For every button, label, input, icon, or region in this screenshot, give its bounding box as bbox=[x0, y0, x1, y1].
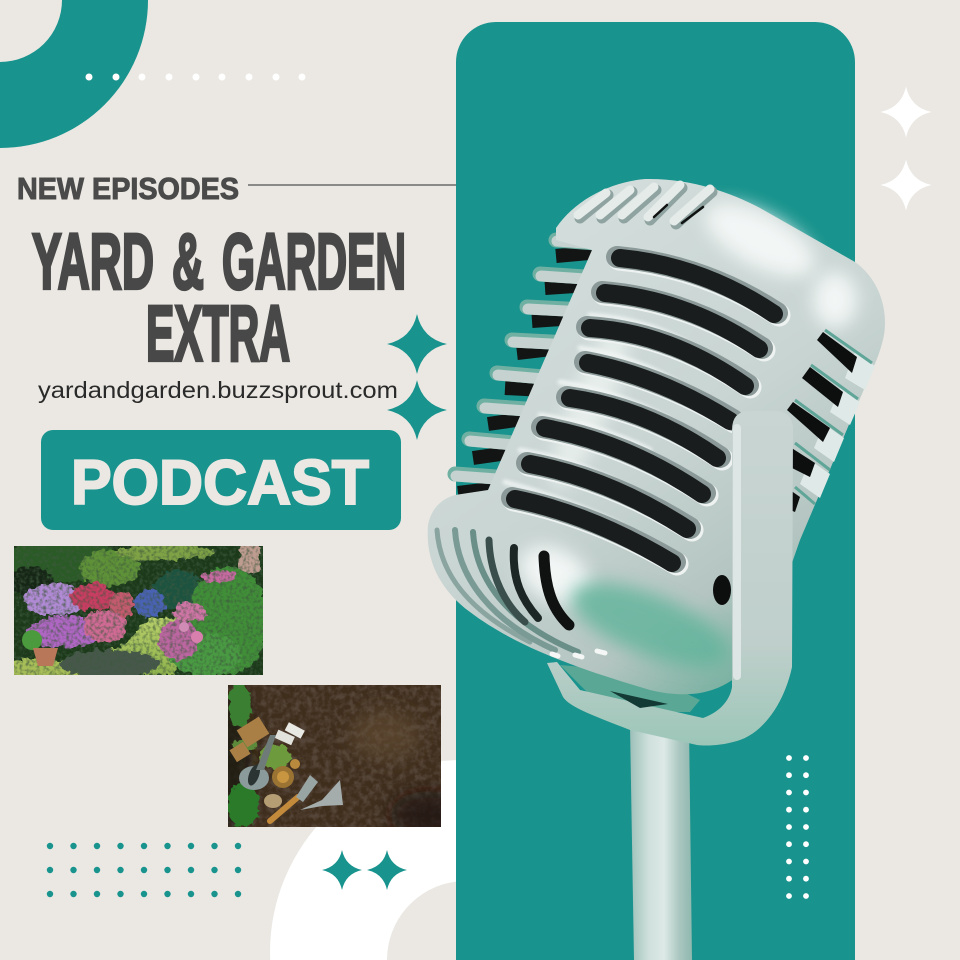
mic right grille bbox=[787, 330, 875, 512]
mic bracket sheen bbox=[733, 424, 741, 680]
corner arc shape bbox=[0, 0, 148, 148]
dot grid: panel right bbox=[786, 755, 809, 899]
mic screw shadow bbox=[610, 691, 668, 708]
title: & bbox=[172, 216, 204, 306]
kicker: new episodes: NEW EPISODES bbox=[17, 171, 239, 206]
mic top ribs bbox=[578, 185, 712, 224]
mic rib sheen bbox=[505, 315, 690, 525]
icon: teal sparkles by title bbox=[387, 314, 447, 440]
website url: yardandgarden.buzzsprout.com bbox=[38, 377, 398, 403]
title: EXTRA bbox=[146, 288, 290, 378]
title: GARDEN bbox=[222, 216, 406, 306]
dot grid: bottom left bbox=[47, 843, 241, 897]
mic front slots bbox=[512, 257, 779, 564]
icon: teal sparkles bottom bbox=[322, 850, 407, 890]
mic left ribs bbox=[455, 240, 610, 493]
kicker rule bbox=[248, 184, 456, 186]
dotted row: top bbox=[86, 74, 306, 80]
mic bracket bbox=[547, 411, 793, 746]
mic head highlights bbox=[509, 189, 857, 617]
icon: white sparkles top right bbox=[880, 86, 932, 210]
title: YARD bbox=[32, 216, 154, 306]
title bbox=[32, 216, 406, 378]
microphone bbox=[428, 179, 885, 960]
mic pivot knob bbox=[713, 575, 731, 605]
mic lower teal reflection bbox=[560, 565, 740, 685]
photo: hydrangea garden bbox=[14, 546, 263, 675]
podcast badge bbox=[41, 430, 401, 530]
teal panel bbox=[456, 22, 855, 960]
mic head underside lip bbox=[560, 665, 700, 712]
mic head bbox=[428, 179, 885, 694]
podcast badge: PODCAST bbox=[71, 448, 369, 518]
mic stem bbox=[630, 725, 692, 960]
photo: soil and garden tools bbox=[228, 685, 441, 827]
mic bottom grille bbox=[437, 530, 605, 657]
bottom semicircle decoration bbox=[270, 760, 456, 960]
